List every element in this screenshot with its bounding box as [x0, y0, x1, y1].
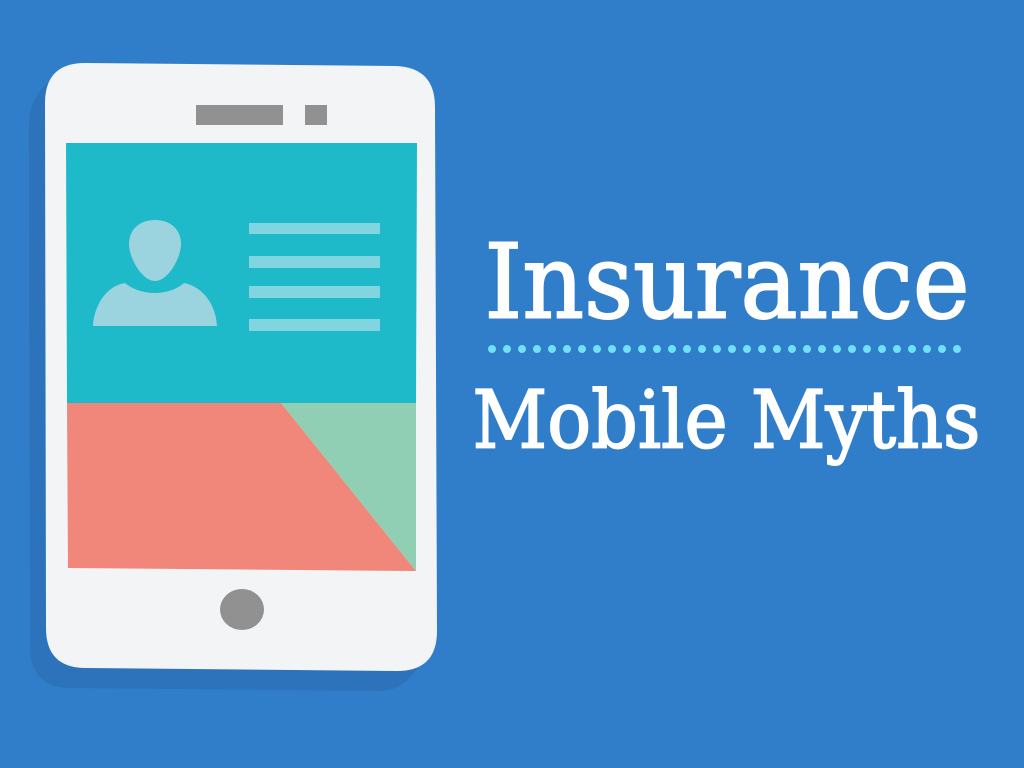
dotted divider [492, 345, 958, 353]
title: Insurance: Insurance [484, 222, 970, 342]
user icon [93, 220, 217, 326]
line 4 [249, 319, 380, 331]
line 3 [249, 286, 380, 298]
phone illustration [29, 63, 437, 691]
speaker [196, 105, 283, 125]
screen green panel [281, 403, 416, 571]
profile text lines [249, 223, 380, 331]
user shoulders [93, 283, 217, 326]
line 1 [249, 223, 380, 234]
camera [305, 105, 327, 125]
line 2 [249, 256, 380, 268]
screen coral panel [67, 403, 416, 571]
phone shadow [29, 74, 421, 691]
screen top panel [66, 143, 417, 403]
user head [129, 220, 181, 281]
phone body [45, 63, 437, 671]
subtitle: Mobile Myths: Mobile Myths [472, 374, 980, 466]
home button [220, 589, 264, 630]
